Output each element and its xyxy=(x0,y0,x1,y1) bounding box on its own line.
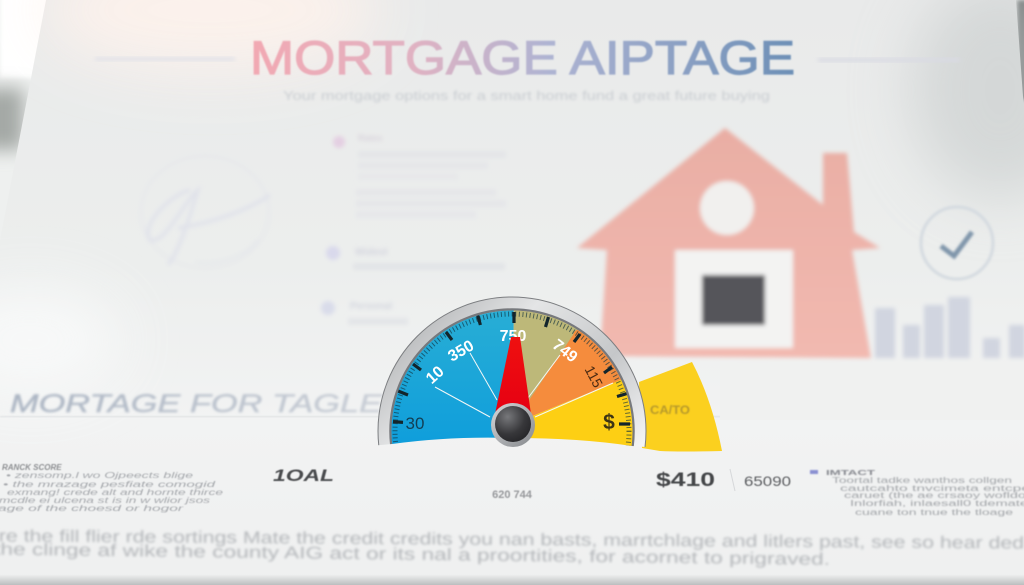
needle hub xyxy=(491,403,535,447)
score notes left: exmang! crede alt and hornte thirce xyxy=(7,487,223,497)
title rule right xyxy=(818,58,960,62)
gauge bezel xyxy=(378,298,646,447)
amount: $410 xyxy=(656,469,715,491)
impact notes right: Toortal tadke wanthos collgen xyxy=(832,476,1012,485)
door panel xyxy=(675,250,793,348)
title rule left xyxy=(95,57,235,61)
house silhouette xyxy=(577,128,880,358)
label 749: 749 xyxy=(549,336,581,366)
bottom paragraph xyxy=(0,526,1024,569)
label 30: 30 xyxy=(406,414,424,433)
credit score gauge xyxy=(378,296,646,447)
bar chart xyxy=(875,297,1024,358)
dark square xyxy=(702,275,765,325)
secondary amount: 65090 xyxy=(744,474,791,489)
impact notes right: cautcahto tnvcimeta entcpe xyxy=(840,484,1024,493)
score notes left: • the mrazage pesfiate comogid xyxy=(3,479,215,489)
impact notes right xyxy=(810,468,1024,517)
item: personal xyxy=(321,301,408,325)
score notes left xyxy=(0,463,223,513)
subtitle: Your mortgage options for a smart home fund a great future buying xyxy=(283,88,770,103)
minor ticks xyxy=(392,312,632,446)
impact notes right: Inlorfiah, inlaesall0 tdemate xyxy=(850,499,1024,508)
label 10: 10 xyxy=(423,363,448,388)
item: widest xyxy=(326,246,505,270)
section heading: MORTAGE FOR TAGLE xyxy=(10,390,382,418)
item: rates xyxy=(333,133,506,218)
score notes left: mcdle ei ulcena st is in w wlior jsos xyxy=(0,495,211,505)
needle xyxy=(495,337,531,414)
house icon xyxy=(577,128,880,358)
yellow outer tab xyxy=(639,362,722,452)
amount divider xyxy=(730,469,735,491)
label orange zone: 115 xyxy=(582,363,606,390)
signature seal xyxy=(141,156,270,268)
item: widest: Widest xyxy=(355,247,388,258)
blue zone xyxy=(392,310,514,444)
gauge labels xyxy=(406,328,615,434)
item: personal: Personal xyxy=(350,301,392,312)
yellow zone xyxy=(530,380,632,446)
gauge face xyxy=(392,310,632,446)
zone lines xyxy=(435,353,613,417)
score notes left: age of the choesd or hogor xyxy=(0,503,185,513)
score range: 620 744 xyxy=(492,489,533,501)
title: MORTGAGE AIPTAGE xyxy=(250,31,795,84)
olive left boundary fill xyxy=(514,310,576,400)
item: rates: Rates xyxy=(358,133,383,143)
label 750: 750 xyxy=(500,328,526,345)
score notes left: • zensomp.l wo Ojpeects blige xyxy=(6,470,193,480)
score notes left: RANCK SCORE xyxy=(2,463,62,472)
check badge xyxy=(921,207,993,279)
impact notes right: IMTACT xyxy=(826,468,876,477)
impact marker xyxy=(810,470,818,474)
label 350: 350 xyxy=(445,337,477,365)
round window xyxy=(700,181,754,235)
feature list xyxy=(321,133,506,325)
impact notes right: caruet (the ae crsaoy wofldo xyxy=(844,491,1024,500)
orange zone xyxy=(529,330,621,416)
major ticks xyxy=(393,312,630,424)
label dollar: $ xyxy=(603,411,615,434)
tab label: CA/TO xyxy=(650,403,690,417)
total label: 1OAL xyxy=(273,466,334,485)
impact notes right: cuane ton tnue the tloage xyxy=(855,508,1014,517)
bottom paragraph: ire the fill flier rde sortings Mate the credit credits you nan basts, marrtchlage and litlers past, see so hear ded, xyxy=(0,526,1024,553)
bottom paragraph: the clinge af wike the county AIG act or its nal a proortities, for acornet to prigraved. xyxy=(0,540,830,569)
olive zone xyxy=(514,310,592,400)
